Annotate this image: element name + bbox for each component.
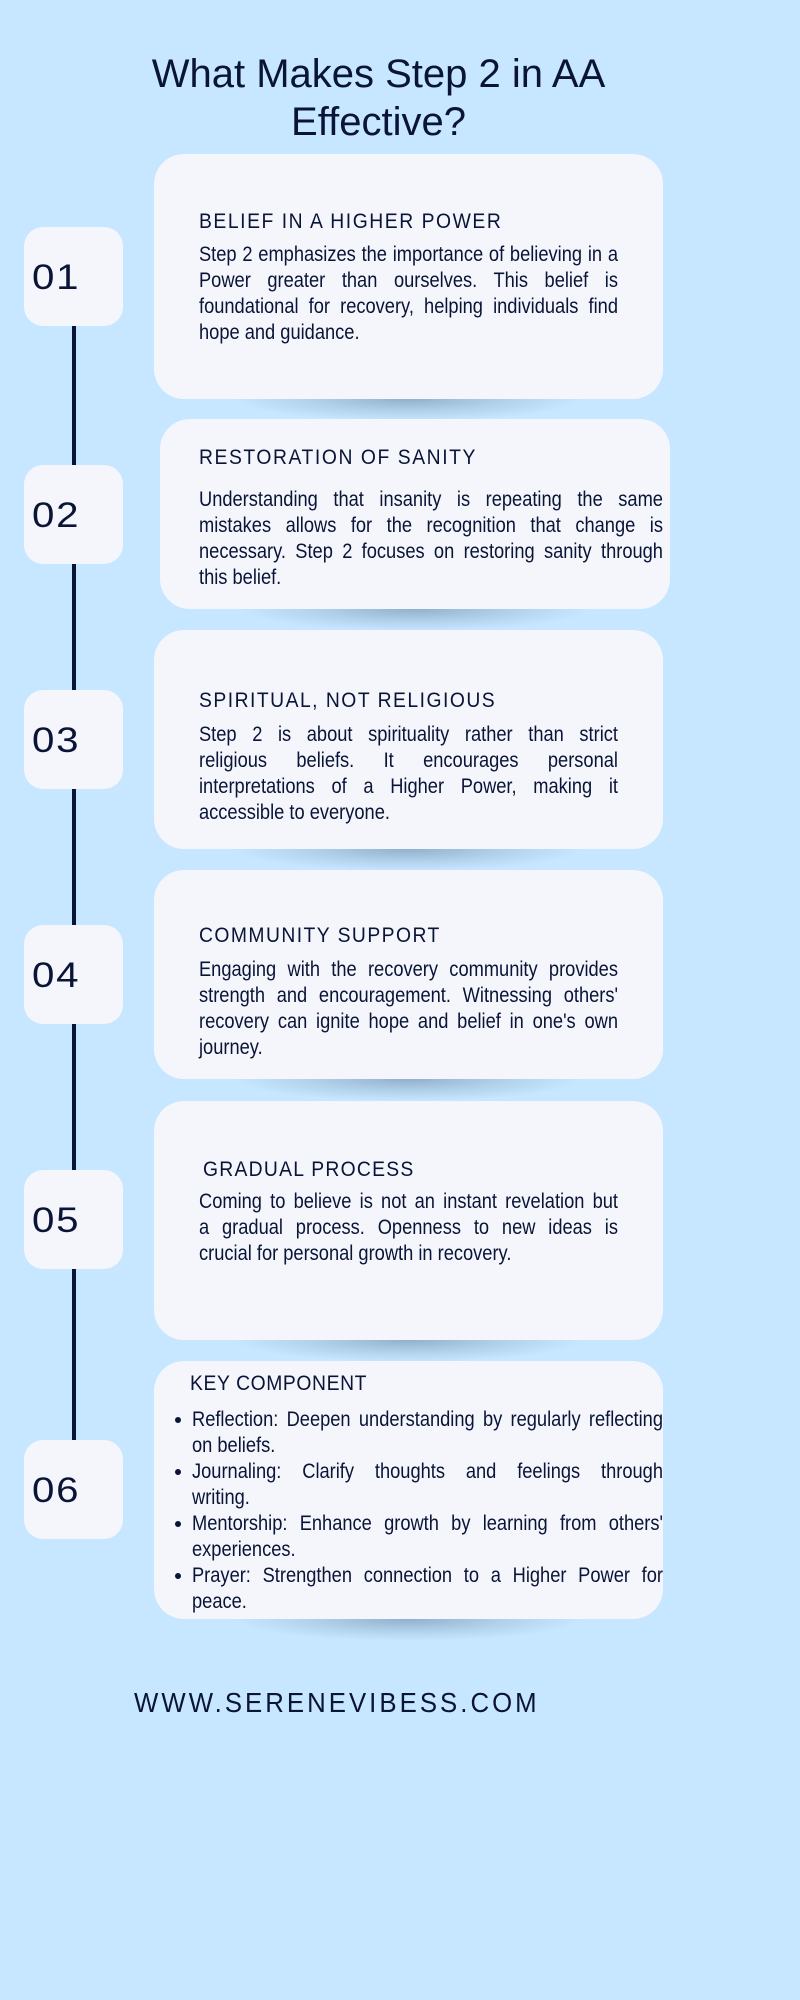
text: sanity description: mistakes allows for the recognition that change is <box>199 514 663 537</box>
text: belief description <box>199 243 618 344</box>
list: key components <box>175 1408 663 1613</box>
text: belief description: hope and guidance. <box>199 321 360 344</box>
footer website: WWW.SERENEVIBESS.COM <box>134 1687 540 1718</box>
list: key components: peace. <box>192 1590 247 1613</box>
text: spiritual description: interpretations of a Higher Power, making it <box>199 775 618 798</box>
list: key components: Prayer: Strengthen connection to a Higher Power for <box>192 1564 663 1587</box>
number badge 04: 04 <box>32 956 80 995</box>
shadow: card 5 <box>234 1340 582 1362</box>
shadow: card 1 <box>234 399 582 421</box>
text: gradual description: Coming to believe is not an instant revelation but <box>199 1190 618 1213</box>
text: belief description: Power greater than ourselves. This belief is <box>199 269 618 292</box>
panel: card 1 belief in a higher power <box>154 154 663 399</box>
heading: gradual process: GRADUAL PROCESS <box>203 1158 415 1181</box>
text: spiritual description <box>199 723 618 824</box>
text: sanity description: necessary. Step 2 focuses on restoring sanity through <box>199 540 663 563</box>
shadow: card 2 <box>241 609 589 631</box>
title <box>152 52 606 144</box>
panel: card 2 restoration of sanity <box>160 419 670 609</box>
text: community description: recovery can ignite hope and belief in one's own <box>199 1010 618 1033</box>
text: sanity description <box>199 488 663 589</box>
text: belief description: Step 2 emphasizes the importance of believing in a <box>199 243 618 266</box>
text: gradual description <box>199 1190 618 1265</box>
number badge 02 <box>24 465 123 564</box>
shadow: card 6 <box>234 1619 582 1641</box>
number badge 03: 03 <box>32 721 80 760</box>
number badge 05 <box>24 1170 123 1269</box>
timeline connector line <box>72 320 76 1445</box>
number badge 03 <box>24 690 123 789</box>
number badge 01: 01 <box>32 258 80 297</box>
list: key components: Reflection: Deepen understanding by regularly reflecting <box>192 1408 663 1431</box>
text: community description: journey. <box>199 1036 263 1059</box>
text: sanity description: this belief. <box>199 566 281 589</box>
text: community description: Engaging with the recovery community provides <box>199 958 618 981</box>
number badge 04 <box>24 925 123 1024</box>
panel: card 5 gradual process <box>154 1101 663 1340</box>
list: key components: Mentorship: Enhance growth by learning from others' <box>192 1512 663 1535</box>
number badge 01 <box>24 227 123 326</box>
text: belief description: foundational for recovery, helping individuals find <box>199 295 618 318</box>
text: gradual description: crucial for personal growth in recovery. <box>199 1242 511 1265</box>
heading: key component: KEY COMPONENT <box>190 1372 367 1395</box>
text: spiritual description: religious beliefs. It encourages personal <box>199 749 618 772</box>
number badge 06: 06 <box>32 1471 80 1510</box>
text: community description <box>198 958 618 1059</box>
text: spiritual description: Step 2 is about spirituality rather than strict <box>199 723 618 746</box>
text: community description: strength and encouragement. Witnessing others' <box>199 984 618 1007</box>
text: spiritual description: accessible to everyone. <box>199 801 390 824</box>
shadow: card 4 <box>234 1079 582 1101</box>
text: gradual description: a gradual process. Openness to new ideas is <box>199 1216 618 1239</box>
heading: restoration of sanity: RESTORATION OF SANITY <box>199 446 477 469</box>
number badge 05: 05 <box>32 1201 80 1240</box>
title: What Makes Step 2 in AA <box>152 52 605 96</box>
list: key components: on beliefs. <box>192 1434 275 1457</box>
list: key components: experiences. <box>192 1538 296 1561</box>
heading: belief in a higher power: BELIEF IN A HIGHER POWER <box>199 210 502 233</box>
panel: card 4 community support <box>154 870 663 1079</box>
text: sanity description: Understanding that insanity is repeating the same <box>199 488 663 511</box>
heading: community support: COMMUNITY SUPPORT <box>199 924 441 947</box>
number badge 06 <box>24 1440 123 1539</box>
title: Effective? <box>291 100 466 144</box>
shadow: card 3 <box>234 849 582 871</box>
list: key components: writing. <box>192 1486 250 1509</box>
number badge 02: 02 <box>32 496 80 535</box>
heading: spiritual, not religious: SPIRITUAL, NOT RELIGIOUS <box>199 689 496 712</box>
panel: card 6 key component <box>154 1361 663 1619</box>
panel: card 3 spiritual, not religious <box>154 630 663 849</box>
list: key components: Journaling: Clarify thoughts and feelings through <box>192 1460 663 1483</box>
